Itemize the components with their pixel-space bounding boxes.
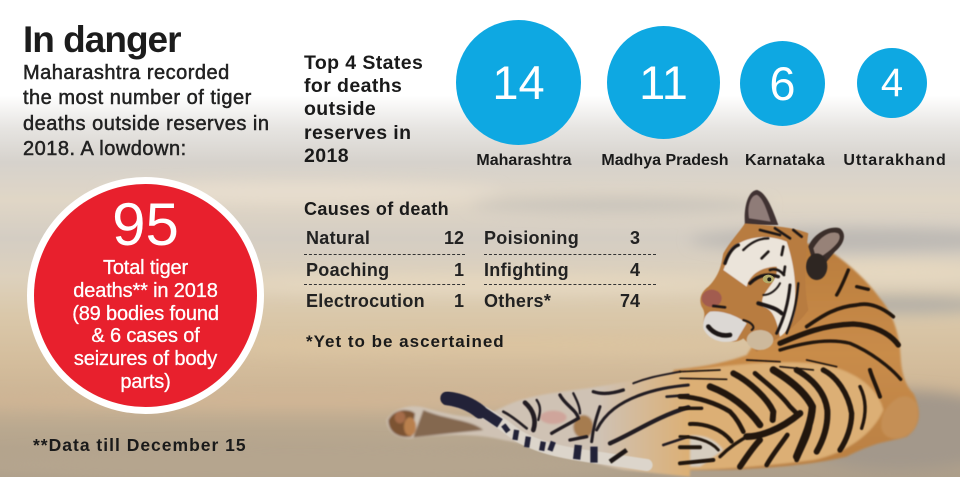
heading: top 4 states: 2018 [304,145,349,167]
footnote: data date: **Data till December 15 [33,435,247,455]
tiger stripes [680,270,901,467]
callout text [72,257,219,393]
callout text: (89 bodies found [72,303,219,325]
bubble: Madhya Pradesh 11 [607,26,720,139]
heading: top 4 states: for deaths [304,75,402,97]
bubble: Maharashtra 14: 14 [492,56,545,109]
callout text: seizures of body [74,348,217,370]
tiger hind leg and tail, drawn in crop coordinates [387,370,690,477]
tiger body and head, drawn in crop coordinates [673,237,919,470]
table: causes of death: Natural [306,228,370,248]
tiger head and stripes, drawn in crop coordinates [680,190,901,467]
bubble: Uttarakhand 4: 4 [881,61,903,105]
tiger head [700,223,808,352]
intro text: 2018. A lowdown: [23,138,187,160]
label: Karnataka: Karnataka [745,152,825,169]
heading: causes of death: Causes of death [304,199,449,219]
bubble: Karnataka 6 [740,41,825,126]
table: causes of death: 1 [454,291,464,311]
table: causes of death [304,228,656,311]
intro text: Maharashtra recorded [23,62,230,84]
heading: top 4 states: outside [304,98,376,120]
table: causes of death: Poisioning [484,228,579,248]
label: Uttarakhand: Uttarakhand [843,152,947,169]
title: In danger [23,19,181,60]
icon: tiger [387,190,919,477]
callout text: deaths** in 2018 [73,280,218,302]
heading: top 4 states [304,52,423,167]
label: Madhya Pradesh: Madhya Pradesh [601,152,729,169]
heading: top 4 states: Top 4 States [304,52,423,74]
label: Maharashtra: Maharashtra [476,152,572,169]
table: causes of death: Poaching [306,260,389,280]
callout text: & 6 cases of [91,325,200,347]
table: causes of death: Electrocution [306,291,425,311]
table: causes of death: 3 [630,228,640,248]
callout text: Total tiger [103,257,188,279]
table: causes of death: Infighting [484,260,569,280]
heading: top 4 states: reserves in [304,122,411,144]
bubble: Maharashtra 14 [456,20,581,145]
bubble: Karnataka 6: 6 [769,57,796,110]
intro text: deaths outside reserves in [23,113,269,135]
callout: total tiger deaths [27,177,264,414]
table: causes of death: 12 [444,228,464,248]
table: causes of death: 4 [630,260,640,280]
intro text: the most number of tiger [23,87,252,109]
table: causes of death: 74 [620,291,640,311]
footnote: yet to be ascertained: *Yet to be ascertained [306,332,505,351]
intro text [23,62,269,160]
bubble: Madhya Pradesh 11: 11 [639,56,688,109]
callout number: 95 [112,191,179,258]
table: causes of death: 1 [454,260,464,280]
table: causes of death: Others* [484,291,551,311]
callout text: parts) [120,371,171,393]
tiger left ear [745,190,778,225]
tiger tail [448,398,647,465]
tiger right ear [808,228,844,273]
bubble: Uttarakhand 4 [857,48,927,118]
